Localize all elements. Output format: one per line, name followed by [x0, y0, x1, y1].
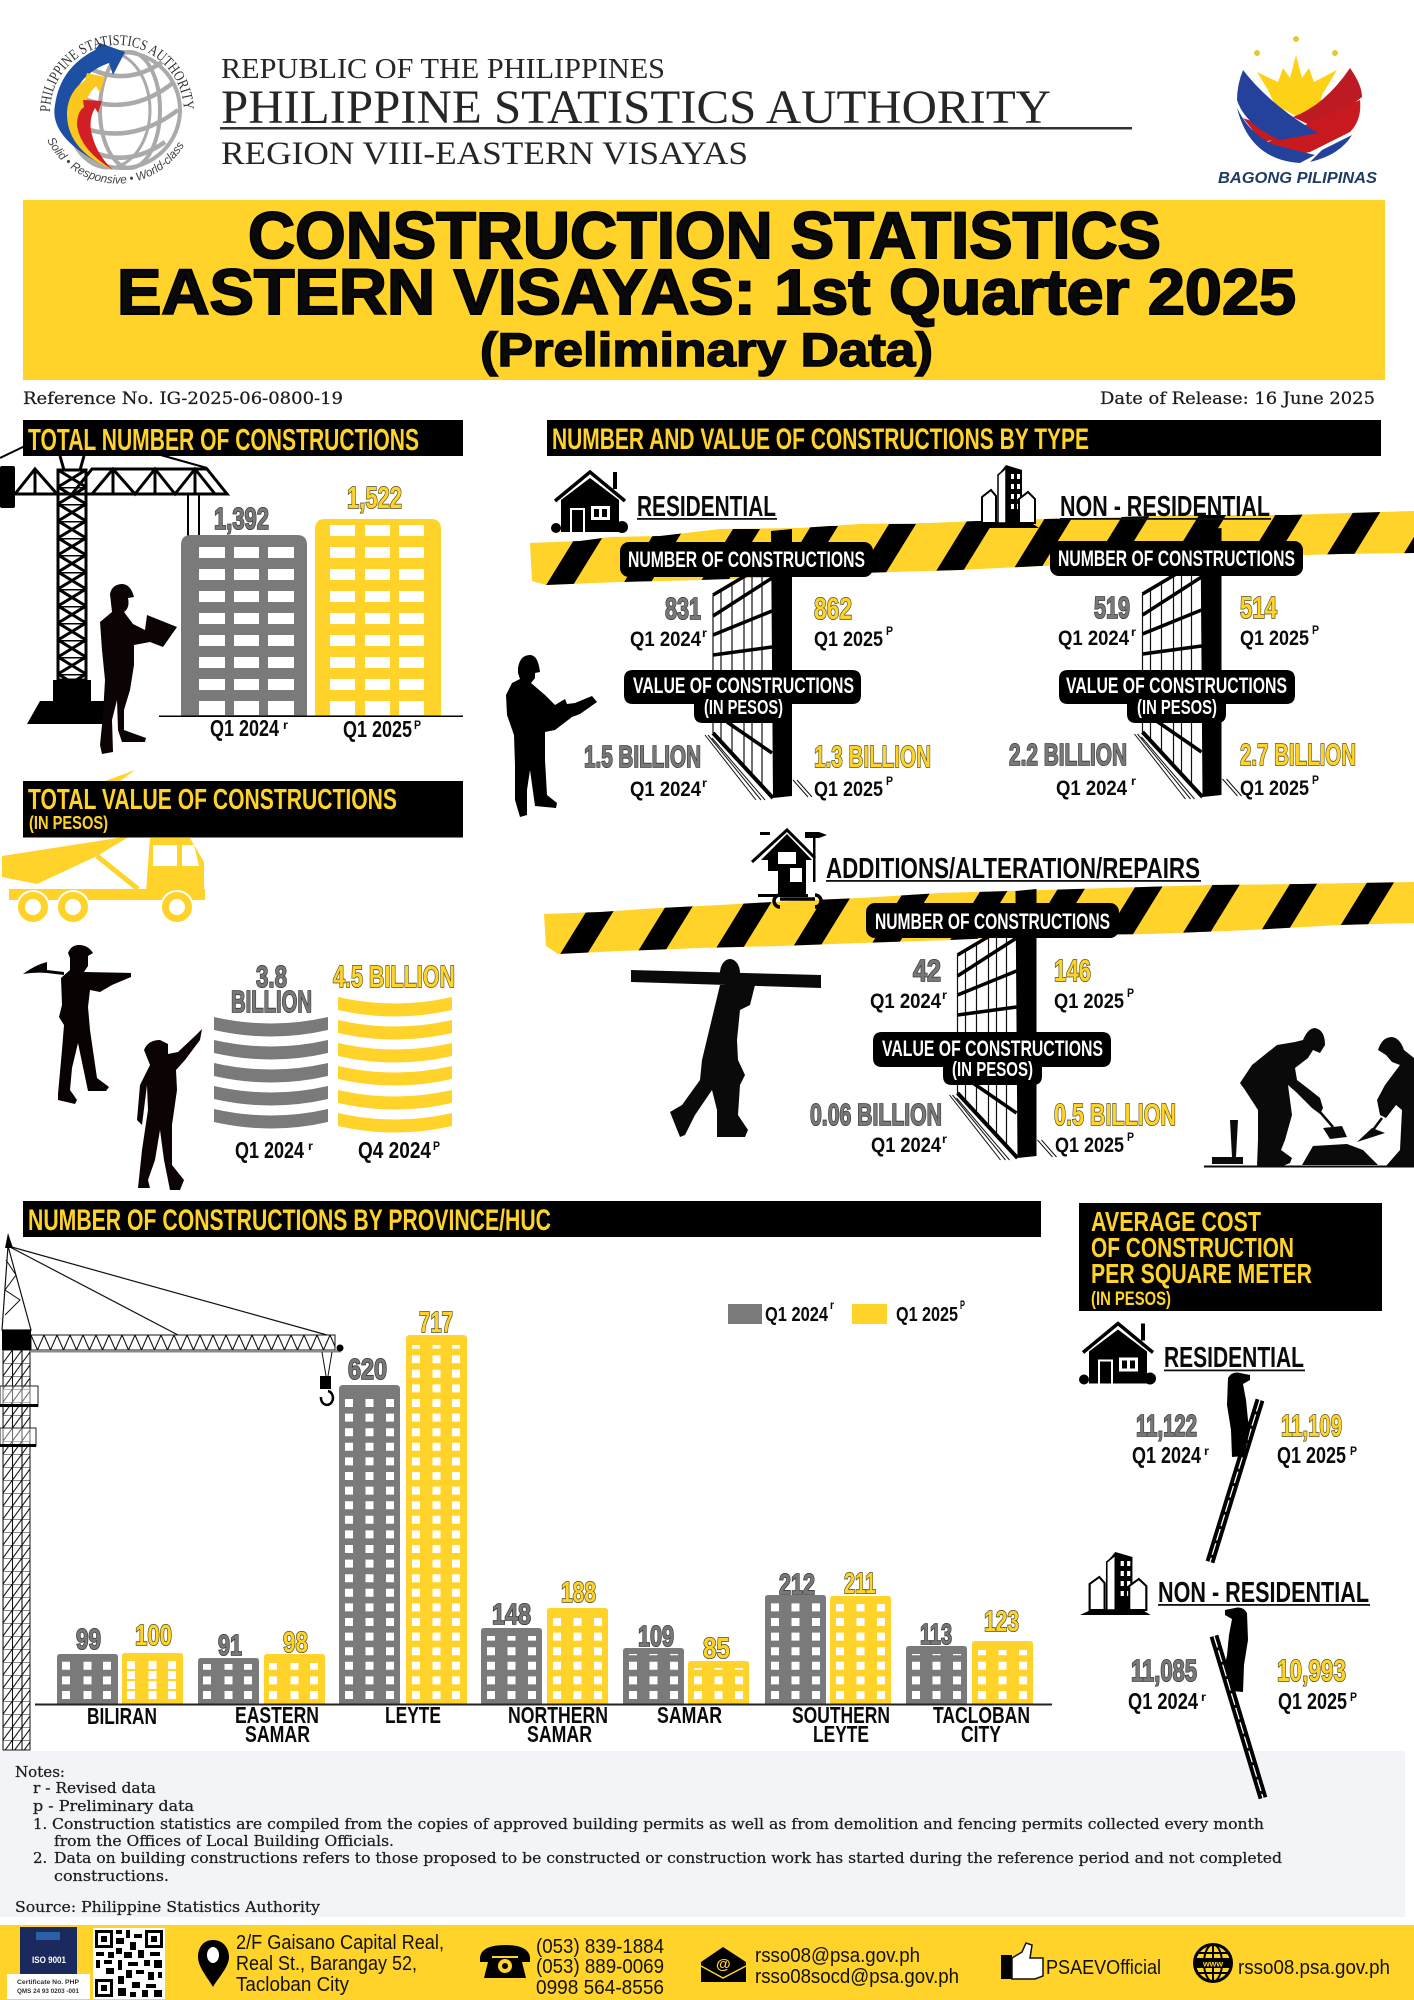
icon: worker carrying beam — [631, 959, 821, 1137]
building wall — [950, 889, 1056, 1160]
email addresses — [755, 1945, 959, 1988]
title banner: CONSTRUCTION STATISTICS — [248, 198, 1161, 272]
heading: TOTAL VALUE OF CONSTRUCTIONS — [28, 784, 397, 816]
bars: Leyte: 620 — [348, 1354, 387, 1386]
header: agency name: PHILIPPINE STATISTICS AUTHORITY — [221, 81, 1051, 134]
bars: Northern Samar: 188 — [561, 1577, 596, 1609]
panel: notes: Notes: — [15, 1763, 65, 1781]
date of release: Date of Release: 16 June 2025 — [1100, 389, 1375, 409]
icon: worker on ladder — [1214, 1608, 1263, 1798]
figures: 10,993 — [1277, 1653, 1346, 1688]
icon: dump truck — [2, 770, 205, 924]
province labels: NORTHERN — [508, 1702, 608, 1728]
panel: notes: constructions. — [54, 1867, 169, 1885]
title banner: EASTERN VISAYAS: 1st Quarter 2025 — [117, 256, 1296, 328]
heading: AVERAGE COST — [1091, 1206, 1261, 1237]
address: 2/F Gaisano Capital Real, — [236, 1932, 444, 1954]
value figures: Q1 2024 — [1056, 777, 1127, 800]
number values: Q1 2025 — [814, 628, 883, 651]
value figures: P — [1312, 773, 1319, 787]
legend — [728, 1298, 965, 1326]
number values: Q1 2024 — [870, 990, 941, 1013]
bars: Biliran: 100 — [135, 1620, 172, 1652]
figures: Q1 2025 — [1278, 1688, 1347, 1714]
value figures: 2.2 BILLION — [1009, 737, 1127, 772]
figures: 11,085 — [1131, 1653, 1197, 1688]
coin stack: Q1 2024: BILLION — [231, 984, 312, 1019]
bars: Leyte: 717 — [419, 1307, 453, 1339]
header: PSA logo: PHILIPPINE STATISTICS AUTHORITY — [40, 35, 194, 112]
axis labels: Q1 2025 — [343, 716, 412, 742]
icon: office tower — [973, 465, 1039, 528]
panel: total number of constructions — [0, 420, 463, 754]
box: value of constructions: (IN PESOS) — [1137, 697, 1217, 719]
panel: notes: Source: Philippine Statistics Authority — [15, 1898, 321, 1916]
bars: Eastern Samar — [198, 1627, 325, 1704]
value figures: r — [702, 776, 707, 790]
box: number of constructions — [620, 542, 873, 577]
number values: r — [702, 626, 707, 640]
box: value of constructions — [1059, 670, 1295, 723]
figures: Q1 2024 — [1132, 1442, 1201, 1468]
phone numbers: (053) 889-0069 — [536, 1956, 664, 1978]
Bagong Pilipinas logo — [1218, 36, 1377, 187]
website: rsso08.psa.gov.ph — [1238, 1957, 1390, 1979]
province labels — [87, 1702, 1030, 1747]
icon: worker pointing — [137, 1029, 202, 1190]
number values: 42 — [913, 953, 941, 988]
bars: Southern Leyte: 212 — [779, 1569, 815, 1601]
bars: Biliran — [57, 1620, 183, 1704]
panel: notes: Construction statistics are compiled from the copies of approved building permits as well as from demolition and fencing permits collected every month — [52, 1815, 1264, 1833]
number values: Q1 2024 — [630, 628, 701, 651]
number values — [870, 953, 1134, 1013]
icon: house with tools — [752, 830, 827, 907]
axis labels: Q1 2024 — [235, 1137, 304, 1163]
value figures — [810, 1097, 1176, 1157]
value figures: Q1 2024 — [871, 1134, 941, 1157]
number values: 831 — [665, 591, 701, 626]
ISO 9001 badge: QMS 24 93 0203 -001 — [17, 1988, 79, 1995]
axis labels — [210, 715, 421, 742]
Bagong Pilipinas logo: BAGONG PILIPINAS — [1218, 170, 1377, 187]
icon: envelope — [701, 1947, 746, 1982]
phone numbers: 0998 564-8556 — [536, 1977, 664, 1999]
figures — [1128, 1653, 1357, 1714]
number values: Q1 2025 — [1240, 627, 1309, 650]
number values: 862 — [814, 591, 852, 626]
figures: P — [1350, 1444, 1357, 1458]
box: value of constructions: VALUE OF CONSTRUCTIONS — [1066, 673, 1287, 698]
hazard tape: lower — [544, 882, 1414, 954]
phone numbers — [536, 1936, 664, 1999]
number values: P — [1127, 986, 1134, 1000]
province labels: SOUTHERN — [792, 1702, 890, 1728]
building wall — [705, 529, 812, 800]
subheading: NON - RESIDENTIAL — [1060, 491, 1270, 523]
Facebook handle: PSAEVOfficial — [1046, 1957, 1161, 1979]
value figures: Q1 2025 — [814, 778, 883, 801]
box: value of constructions: VALUE OF CONSTRUCTIONS — [882, 1036, 1103, 1061]
subheading: ADDITIONS/ALTERATION/REPAIRS — [826, 853, 1200, 885]
QR code — [93, 1928, 165, 1999]
icon: worker with shovel — [23, 945, 131, 1104]
icon: globe — [1194, 1944, 1232, 1982]
legend: Q1 2024 — [765, 1304, 829, 1326]
bars: Northern Samar — [481, 1577, 608, 1704]
province labels: TACLOBAN — [933, 1702, 1030, 1728]
box: value of constructions: VALUE OF CONSTRUCTIONS — [633, 673, 854, 698]
value figures: r — [1131, 774, 1136, 788]
box: value of constructions — [624, 670, 861, 723]
number values — [1058, 590, 1319, 650]
phone numbers: (053) 839-1884 — [536, 1936, 664, 1958]
province labels: CITY — [961, 1721, 1001, 1747]
number values: P — [1312, 623, 1319, 637]
number values: P — [886, 624, 893, 638]
type: non-residential — [1080, 1552, 1370, 1798]
bars: Southern Leyte — [765, 1568, 891, 1704]
bars: Biliran: 99 — [76, 1624, 101, 1656]
building bar: Q1 2025 — [315, 480, 441, 716]
number values: 146 — [1054, 953, 1091, 988]
value figures: 2.7 BILLION — [1240, 737, 1356, 772]
value figures: P — [1127, 1130, 1134, 1144]
box: value of constructions — [873, 1032, 1111, 1085]
icon: tower crane — [0, 446, 227, 724]
title banner: (Preliminary Data) — [480, 323, 933, 376]
figures — [1132, 1408, 1357, 1468]
heading: (IN PESOS) — [29, 813, 108, 833]
coin stack: Q4 2024 — [333, 959, 455, 1132]
bars: Samar: 85 — [703, 1633, 730, 1665]
legend: P — [960, 1298, 965, 1312]
value figures: Q1 2024 — [630, 778, 701, 801]
axis labels — [235, 1137, 440, 1163]
value figures: 1.3 BILLION — [814, 739, 931, 774]
header: PSA logo — [40, 35, 194, 184]
province labels: LEYTE — [385, 1702, 441, 1728]
axis labels: P — [433, 1139, 440, 1153]
heading: (IN PESOS) — [1091, 1289, 1171, 1310]
icon: globe: www — [1202, 1960, 1224, 1968]
figures: r — [1201, 1690, 1206, 1704]
hazard tape: upper — [530, 511, 1414, 585]
heading — [23, 1201, 1041, 1237]
heading: NUMBER AND VALUE OF CONSTRUCTIONS BY TYPE — [552, 423, 1089, 456]
panel: notes: Data on building constructions refers to those proposed to be constructed or construction work has started during the reference period and not completed — [54, 1849, 1282, 1867]
box: number of constructions: NUMBER OF CONSTRUCTIONS — [628, 547, 865, 572]
ISO 9001 badge: Certificate No. PHP — [17, 1979, 80, 1986]
bars: Tacloban City — [906, 1606, 1033, 1704]
figures: Q1 2024 — [1128, 1688, 1198, 1714]
icon: workers digging — [1204, 1028, 1414, 1168]
heading: NUMBER OF CONSTRUCTIONS BY PROVINCE/HUC — [28, 1204, 551, 1237]
box: number of constructions: NUMBER OF CONSTRUCTIONS — [1058, 546, 1295, 571]
box: number of constructions — [1050, 541, 1303, 576]
axis labels: r — [283, 718, 288, 732]
icon: office tower — [1080, 1552, 1151, 1615]
bars: Samar — [623, 1621, 749, 1704]
value figures: r — [942, 1132, 947, 1146]
email addresses: rsso08@psa.gov.ph — [755, 1945, 920, 1967]
icon: worker on ladder — [1210, 1373, 1260, 1562]
number values: 514 — [1240, 590, 1278, 625]
panel: notes: p - Preliminary data — [33, 1797, 194, 1815]
icon: location pin — [198, 1940, 229, 1987]
value figures: P — [886, 774, 893, 788]
panel: number and value by type — [506, 420, 1414, 1168]
value figures: Q1 2025 — [1055, 1134, 1124, 1157]
province labels: BILIRAN — [87, 1703, 157, 1729]
number values: Q1 2024 — [1058, 627, 1129, 650]
box: value of constructions: (IN PESOS) — [952, 1059, 1033, 1081]
figures: r — [1204, 1444, 1209, 1458]
bars: Southern Leyte: 211 — [844, 1568, 876, 1600]
icon: telephone — [480, 1945, 530, 1978]
address — [236, 1932, 444, 1996]
number values — [630, 591, 893, 651]
header: agency name: REPUBLIC OF THE PHILIPPINES — [221, 53, 665, 85]
type: non-residential — [973, 465, 1356, 800]
heading — [23, 781, 463, 838]
heading: TOTAL NUMBER OF CONSTRUCTIONS — [28, 422, 419, 457]
panel: notes: r - Revised data — [33, 1779, 156, 1797]
province labels: SAMAR — [657, 1702, 722, 1728]
title banner — [23, 198, 1385, 380]
icon: house — [1079, 1324, 1156, 1384]
bars: Eastern Samar: 98 — [283, 1627, 308, 1659]
bars: Leyte — [339, 1307, 467, 1704]
bars: Northern Samar: 148 — [492, 1599, 531, 1631]
value figures — [584, 739, 931, 801]
panel: average cost of construction — [1079, 1203, 1382, 1798]
building bar: Q1 2025: 1,522 — [347, 480, 402, 515]
province labels: LEYTE — [813, 1721, 869, 1747]
worker with plans — [506, 655, 597, 817]
heading: PER SQUARE METER — [1091, 1258, 1312, 1289]
building bar: Q1 2024: 1,392 — [214, 501, 269, 536]
coin stack: Q1 2024 — [214, 959, 328, 1128]
province labels: SAMAR — [527, 1721, 592, 1747]
address: Real St., Barangay 52, — [236, 1953, 417, 1975]
value figures — [1009, 737, 1356, 800]
axis labels: Q4 2024 — [358, 1137, 431, 1163]
header: PSA logo: Solid • Responsive • World-class — [48, 138, 184, 184]
type: residential — [1079, 1324, 1357, 1562]
figures: 11,109 — [1281, 1408, 1342, 1443]
value figures: 0.5 BILLION — [1054, 1097, 1176, 1132]
number values: r — [1131, 625, 1136, 639]
panel: total value of constructions — [2, 770, 463, 1190]
panel: notes — [0, 1751, 1405, 1917]
panel: notes: 1. — [33, 1815, 47, 1833]
bars: Tacloban City: 123 — [984, 1606, 1019, 1638]
icon: worker with plans — [100, 584, 177, 754]
bars: Tacloban City: 113 — [920, 1619, 952, 1651]
header: agency name: REGION VIII-EASTERN VISAYAS — [221, 136, 748, 172]
province labels: EASTERN — [235, 1702, 319, 1728]
bars: Samar: 109 — [638, 1621, 674, 1653]
number values: Q1 2025 — [1054, 990, 1124, 1013]
legend: r — [830, 1298, 834, 1312]
axis labels: P — [414, 718, 421, 732]
header: agency name — [220, 53, 1132, 172]
building bar: Q1 2024 — [181, 501, 307, 716]
figures: P — [1350, 1690, 1357, 1704]
value figures: 1.5 BILLION — [584, 739, 701, 774]
subheading: RESIDENTIAL — [1164, 1342, 1304, 1374]
icon: house — [551, 472, 628, 533]
value figures: Q1 2025 — [1240, 777, 1309, 800]
box: number of constructions: NUMBER OF CONSTRUCTIONS — [875, 909, 1110, 934]
heading: OF CONSTRUCTION — [1091, 1232, 1294, 1263]
type: additions / alteration / repairs — [631, 830, 1414, 1168]
type: residential — [551, 472, 931, 801]
ISO 9001 badge: ISO 9001 — [32, 1955, 67, 1966]
icon: envelope: @ — [716, 1956, 731, 1973]
panel: number of constructions by province/HUC — [0, 1201, 1052, 1750]
box: value of constructions: (IN PESOS) — [704, 697, 783, 719]
legend: Q1 2025 — [896, 1304, 958, 1326]
figures: 11,122 — [1136, 1408, 1197, 1443]
number values: r — [942, 988, 947, 1002]
bars: Eastern Samar: 91 — [218, 1630, 242, 1662]
axis labels: Q1 2024 — [210, 715, 279, 741]
coin stack: Q4 2024: 4.5 BILLION — [333, 959, 455, 994]
value figures: 0.06 BILLION — [810, 1097, 942, 1132]
subheading: RESIDENTIAL — [637, 491, 776, 523]
box: number of constructions — [866, 903, 1119, 938]
reference number: Reference No. IG-2025-06-0800-19 — [23, 389, 343, 409]
axis labels: r — [308, 1139, 313, 1153]
building wall — [1134, 528, 1242, 799]
footer band — [0, 1925, 1414, 2000]
panel: notes: from the Offices of Local Building Officials. — [54, 1832, 394, 1850]
panel: notes: 2. — [33, 1849, 47, 1867]
icon: tower crane with hook — [0, 1233, 344, 1750]
ISO 9001 badge — [7, 1927, 90, 1999]
heading — [1079, 1203, 1382, 1311]
address: Tacloban City — [236, 1974, 349, 1996]
province labels: SAMAR — [245, 1721, 310, 1747]
email addresses: rsso08socd@psa.gov.ph — [755, 1966, 959, 1988]
number values: 519 — [1094, 590, 1130, 625]
figures: Q1 2025 — [1277, 1442, 1346, 1468]
icon: thumbs up — [1001, 1943, 1043, 1979]
coin stack: Q1 2024: 3.8 — [256, 959, 287, 994]
